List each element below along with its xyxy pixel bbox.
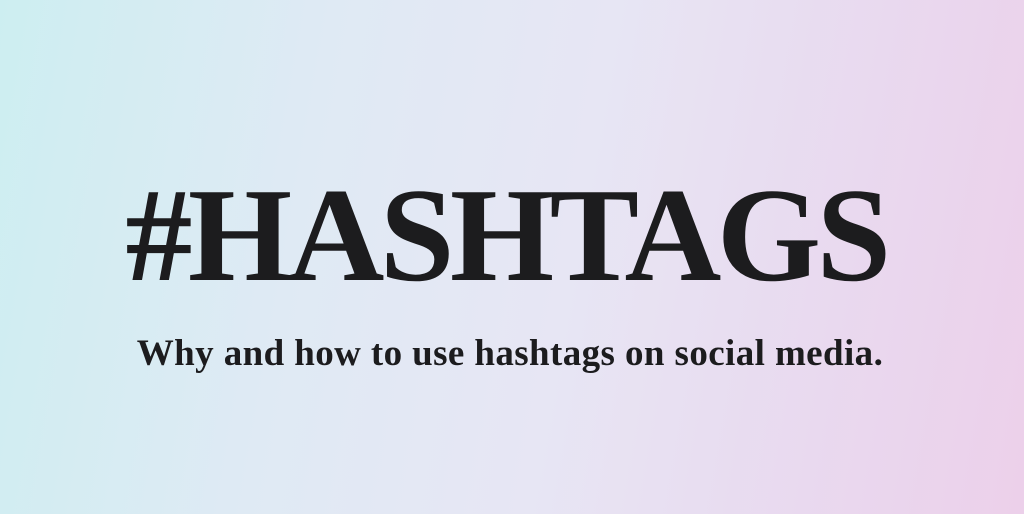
title: #HASHTAGS: [125, 161, 887, 309]
subtitle: Why and how to use hashtags on social media.: [137, 333, 883, 374]
